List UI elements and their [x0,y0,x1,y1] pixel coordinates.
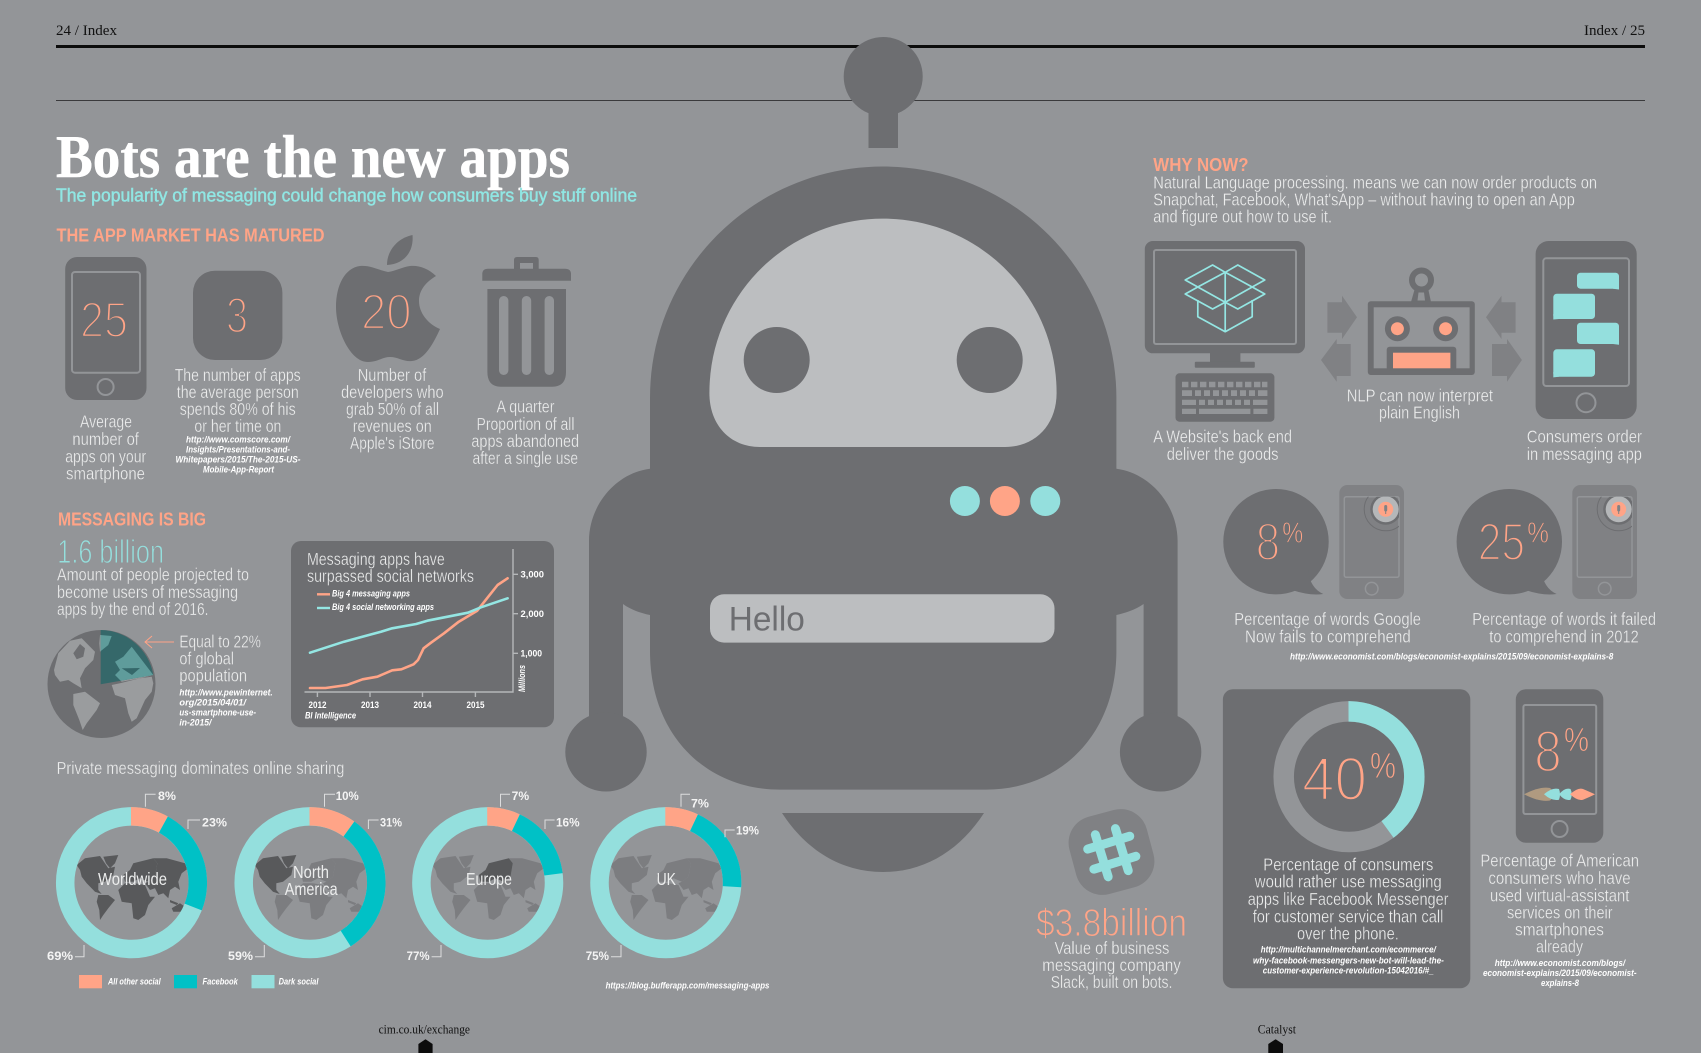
line: big 4 social networking apps [310,598,508,653]
robot antenna [844,37,923,148]
stat: 8% speech bubble: 8 [1256,513,1280,572]
stat description: become users of messaging [57,582,238,602]
stat: a quarter abandoned, trash icon: Proportion of all [476,414,574,434]
ring chart: 40% [1284,711,1414,842]
stat: 20 developers, apple icon: developers who [341,382,444,402]
stat: slack [1036,803,1187,992]
label [285,862,338,899]
y axis labels: 2,000 [520,609,544,619]
chart title: Messaging apps have [307,549,445,569]
stat: 3 apps: Insights/Presentations-and- [186,445,290,455]
section intro text: and figure out how to use it. [1153,207,1332,227]
robot indicator lights [950,486,1060,516]
stat: 20 developers, apple icon: 20 [361,284,412,340]
y axis labels: 3,000 [520,570,544,580]
caption: 8%: Percentage of words Google [1234,609,1421,629]
callout: equal to 22%: Equal to 22% [179,631,261,651]
chart title [307,549,474,586]
stat: 3 apps: the average person [177,382,299,402]
caption: deliver the goods [1167,444,1279,464]
label: North [293,862,329,882]
robot left hand [565,712,647,792]
icon: small robot [1347,270,1493,422]
label: Europe [466,869,512,889]
caption: in messaging app [1527,444,1642,464]
section heading: MESSAGING IS BIG [58,509,206,529]
section: messaging is big [48,509,554,738]
description: Percentage of consumers [1263,855,1434,875]
callout: equal to 22%: of global [179,648,234,668]
percentages [586,794,759,963]
x axis labels: 2012 [308,700,326,710]
callout: equal to 22%: population [179,666,247,686]
footer left: site link: cim.co.uk/exchange [379,1021,470,1036]
caption [1153,427,1292,464]
description: Slack, built on bots. [1051,972,1172,992]
chart source: BI Intelligence [305,711,356,721]
percentages: 7% [691,796,709,810]
caption: 8% [1234,609,1421,646]
x axis labels: 2014 [414,700,432,710]
description: Value of business [1054,938,1170,958]
stat: 25% speech bubble: 25 [1478,513,1525,572]
panel: 40% prefer messaging [1223,689,1470,988]
caption: 25%: Percentage of words it failed [1472,609,1656,629]
percentages: 8% [158,789,176,803]
chart legend: Big 4 social networking apps [332,602,434,612]
central robot illustration [565,37,1201,872]
stat: a quarter abandoned, trash icon: apps abandoned [471,431,579,451]
donut: uk [586,794,759,963]
ring [244,816,376,949]
percentages: 7% [512,789,530,803]
percentages: 31% [380,816,402,830]
caption [1347,386,1493,422]
arrow: to robot [1327,296,1357,339]
section: private messaging donut charts [47,758,769,990]
robot right hand [1120,712,1201,792]
caption: 25%: to comprehend in 2012 [1489,626,1639,646]
value: 8%: % [1564,721,1589,758]
percentages: 69% [47,949,73,963]
section: the app market has matured [56,226,579,483]
section intro text [1153,173,1597,227]
caption [1527,427,1642,464]
stat: 25% speech bubble [1457,489,1562,594]
donut legend: All other social [107,976,161,986]
stat: 25% speech bubble: % [1527,518,1549,550]
stat: a quarter abandoned, trash icon: A quarter [496,397,555,417]
donut legend [79,975,319,988]
callout: equal to 22% [179,631,273,728]
percentages: 16% [556,816,580,830]
stat: 8% speech bubble: % [1282,518,1303,550]
value: 40%: 40 [1302,745,1367,813]
robot chin [782,813,984,872]
stat: a quarter abandoned, trash icon: after a single use [472,448,578,468]
section heading: Private messaging dominates online sharing [57,758,344,778]
icon: desktop computer with box [1145,241,1305,464]
stat: 3 apps: The number of apps [175,365,301,385]
y axis labels: Millions [517,665,527,692]
caption: Consumers order [1527,427,1642,447]
icon: phone with message bubbles [1527,241,1642,464]
label: America [285,879,338,899]
source url: http://www.economist.com/blogs/economist-explains/2015/09/economist-explains-8 [1290,651,1613,661]
chart legend [317,589,434,612]
percentages: 19% [736,823,759,837]
ring [421,816,554,949]
arrow: from phone to robot [1486,296,1516,339]
stat: 3 apps: spends 80% of his [180,399,296,419]
description: apps like Facebook Messenger [1248,889,1449,909]
description: already [1536,937,1583,957]
stat: 8% speech bubble [1223,489,1329,594]
robot speech bar: Hello: Hello [729,600,805,638]
section intro text: Snapchat, Facebook, What'sApp – without having to open an App [1153,190,1575,210]
donut: north america [228,789,402,963]
message bubbles [1553,273,1619,377]
stat description: Amount of people projected to [57,565,249,585]
stat: 3 apps: http://www.comscore.com/ [186,434,291,444]
source url: explains-8 [1541,978,1579,988]
world map [255,855,366,920]
stat description [57,565,249,619]
description: messaging company [1042,955,1181,975]
value: 40%: % [1370,745,1396,786]
stat: 1.6 billion: 1.6 billion [57,533,164,570]
stat: 25 apps on phone: smartphone [66,463,145,483]
stat: 20 developers, apple icon [336,235,444,453]
ring [65,816,198,949]
label: UK [657,869,676,889]
percentages [407,789,580,963]
percentages [228,789,402,963]
description: would rather use messaging [1254,872,1442,892]
source url: https://blog.bufferapp.com/messaging-apps [606,980,769,990]
y axis labels [517,570,544,692]
caption: plain English [1379,402,1460,422]
y axis labels: 1,000 [520,648,542,658]
caption: 8%: Now fails to comprehend [1245,626,1411,646]
arrow: robot to phone [1492,339,1522,382]
stat: 20 developers, apple icon: revenues on [353,416,432,436]
stat description: apps by the end of 2016. [57,599,208,619]
stat: 3 apps: 3 [226,288,248,344]
source url: why-facebook-messengers-new-bot-will-lead-the- [1253,955,1444,965]
callout: equal to 22%: in-2015/ [179,718,213,728]
robot left eye [744,327,810,393]
chart axes [304,549,518,697]
icon: voice waveform [1524,788,1595,801]
footer right: Catalyst [1258,1021,1296,1053]
stat: 25 apps on phone: 25 [80,292,128,348]
ring [600,816,732,949]
description: used virtual-assistant [1490,885,1630,905]
source url: http://multichannelmerchant.com/ecommerce/ [1261,945,1437,955]
x axis labels [308,700,484,710]
caption: 25% [1472,609,1656,646]
panel: line chart messaging vs social [291,541,554,727]
subtitle: The popularity of messaging could change how consumers buy stuff online [56,186,637,206]
stat: 25 apps on phone: Average [80,412,132,432]
stat: 20 developers, apple icon: Number of [358,365,426,385]
icon: keyboard [1176,373,1274,422]
x axis labels: 2013 [361,700,379,710]
callout: equal to 22%: us-smartphone-use- [179,708,256,718]
percentages [47,789,227,963]
icon: globe with highlighted wedge [48,630,156,738]
value: 8%: 8 [1534,720,1562,785]
stat: 3 apps: or her time on [194,416,281,436]
source url [1483,958,1637,988]
stat: 3 apps: Whitepapers/2015/The-2015-US- [176,455,301,465]
stat: 20 developers, apple icon: Apple's iStore [350,433,435,453]
icon: phone with mic, left [1339,485,1407,599]
source url: economist-explains/2015/09/economist- [1483,968,1637,978]
percentages: 77% [407,949,430,963]
description: over the phone. [1297,923,1399,943]
donut: worldwide [47,789,227,963]
section: why now [1145,155,1642,464]
icon: open box [1185,265,1265,332]
description: Percentage of American [1480,851,1639,871]
description [1480,851,1639,957]
robot body and arms [589,166,1178,790]
arrow [145,636,174,648]
footer right: Catalyst: Catalyst [1258,1021,1296,1036]
title: Bots are the new apps [56,124,570,190]
source url: customer-experience-revolution-15042016/#_ [1263,965,1434,975]
page header: right folio: Index / 25 [1584,23,1645,39]
stat: 3 apps: Mobile-App-Report [203,465,275,475]
donut legend: Dark social [279,976,319,986]
section heading: WHY NOW? [1153,155,1248,175]
world map [77,855,188,920]
caption: A Website's back end [1153,427,1292,447]
source url: http://www.economist.com/blogs/ [1495,958,1627,968]
callout: equal to 22%: org/2015/04/01/ [179,698,248,708]
description: services on their [1507,902,1613,922]
arrow: from robot [1321,339,1351,382]
icon: phone with mic, right [1572,485,1640,599]
label: Worldwide [98,869,167,889]
description: smartphones [1515,920,1604,940]
stat: 20 developers, apple icon: grab 50% of all [346,399,439,419]
line: big 4 messaging apps [310,578,508,688]
percentages: 10% [336,789,359,803]
page header: left folio: 24 / Index [56,23,117,39]
icon: slack hash [1063,803,1160,901]
stat: 25 apps on phone: number of [72,429,139,449]
source url [1253,945,1444,975]
callout: equal to 22%: http://www.pewinternet. [179,688,273,698]
robot right eye [957,327,1023,393]
caption: NLP can now interpret [1347,386,1493,406]
x axis labels: 2015 [466,700,484,710]
robot speech bar: Hello [710,594,1054,643]
world map [610,855,722,920]
stat: a quarter abandoned, trash icon [471,257,579,468]
value: 8% [1534,720,1589,785]
stat: 3 apps [175,271,301,475]
description [1042,938,1181,992]
chart title: surpassed social networks [307,566,474,586]
chart legend: Big 4 messaging apps [332,589,410,599]
section heading: THE APP MARKET HAS MATURED [56,226,324,246]
stat: 8% virtual assistant phone [1480,689,1639,988]
donut: europe [407,789,580,963]
description: consumers who have [1488,868,1631,888]
percentages: 75% [586,949,609,963]
donut legend: Facebook [202,976,239,986]
percentages: 23% [202,816,227,830]
footer left: site link [379,1021,470,1053]
value: $3.8billion [1036,902,1187,945]
section: voice recognition stats [1223,485,1656,661]
stat: 25 apps on phone [65,257,146,483]
stat: 25 apps on phone: apps on your [65,446,146,466]
world map [432,855,544,920]
section intro text: Natural Language processing. means we can now order products on [1153,173,1597,193]
description [1248,855,1449,943]
robot face visor [709,219,1057,447]
description: for customer service than call [1253,906,1443,926]
percentages: 59% [228,949,253,963]
